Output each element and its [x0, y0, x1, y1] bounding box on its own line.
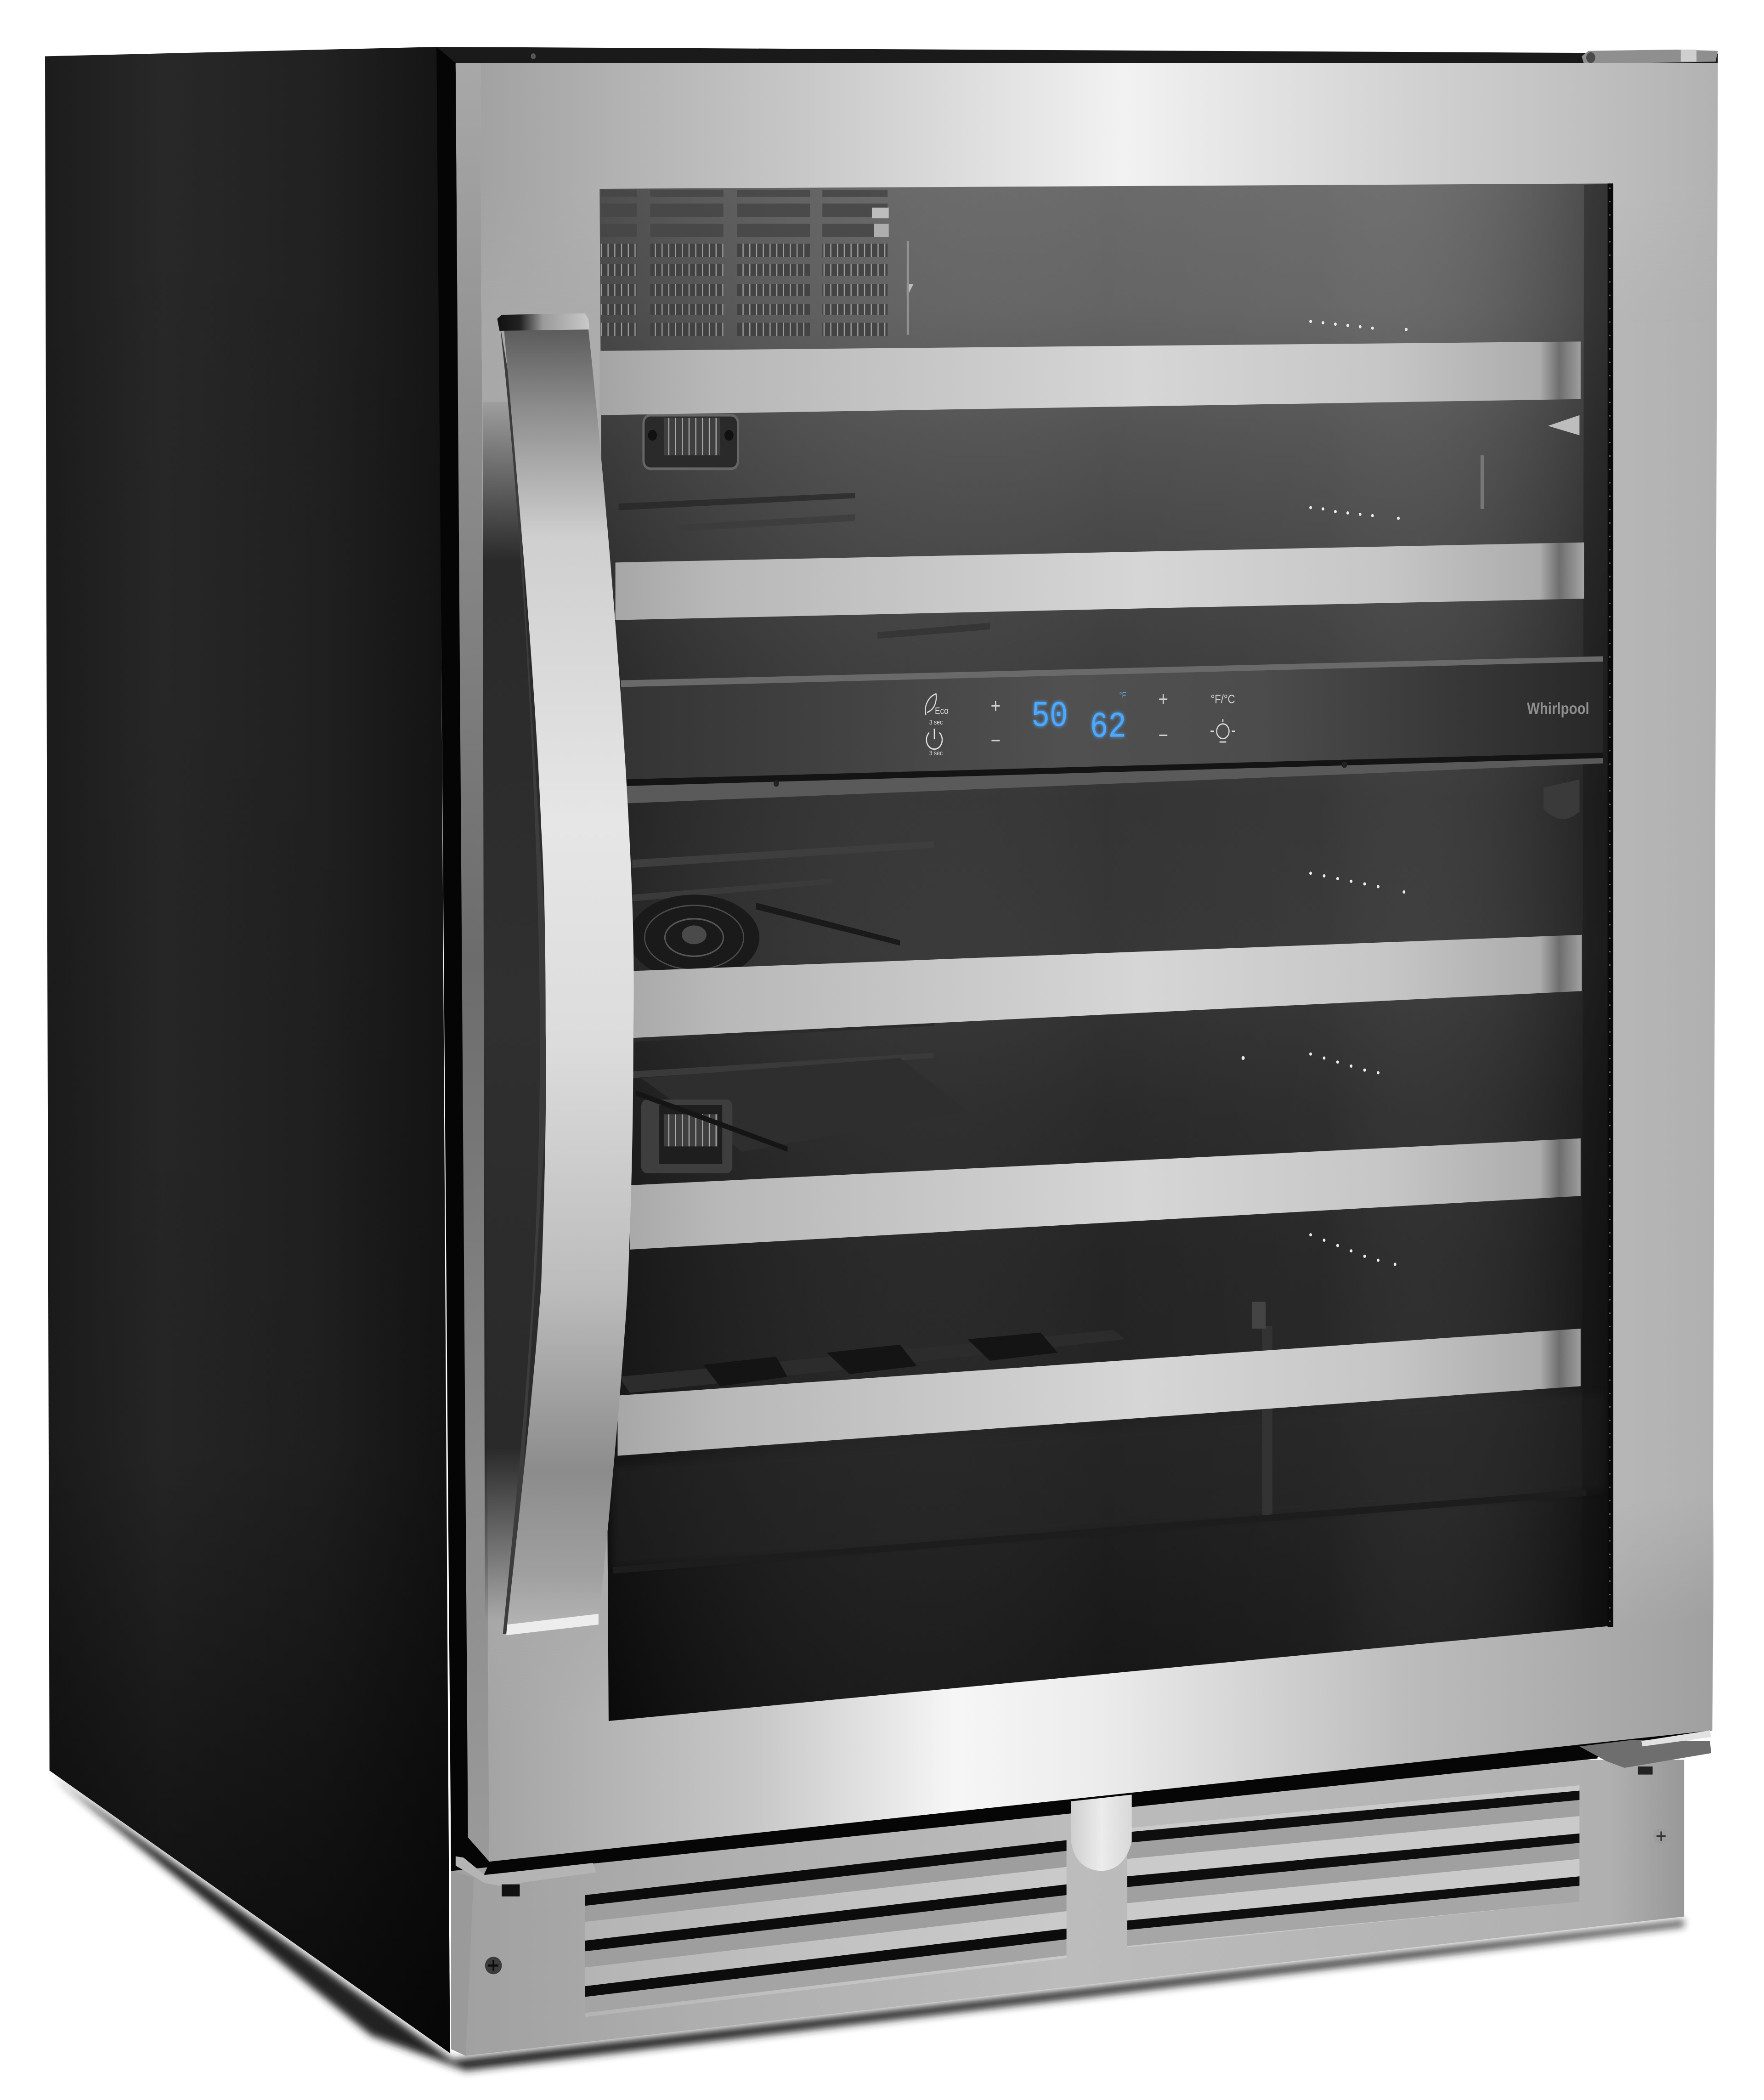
cabinet side panel: [45, 47, 450, 2053]
handle dark edge: [499, 322, 551, 1634]
right screw: [1653, 1828, 1669, 1844]
rear evaporator grille: [601, 190, 914, 336]
glass window: [599, 183, 1613, 1721]
right zone plus and minus: [1159, 687, 1168, 747]
upper rack rails: [619, 493, 990, 639]
right side clips: [1481, 415, 1579, 509]
upper compressor coil: [644, 415, 738, 469]
icon: eco leaf: [925, 694, 949, 726]
wine shelf 2: [616, 543, 1584, 620]
door frame bottom rail: [486, 1473, 1714, 1862]
handle bottom cap: [506, 1614, 599, 1635]
lower interior reflection: [613, 1393, 1603, 1567]
wine shelf 5: [617, 1329, 1581, 1456]
center latch tab: [1071, 1794, 1132, 1871]
control panel: [621, 656, 1603, 804]
icon: power button: 3 sec: [929, 749, 943, 757]
icon: eco leaf: 3 sec: [929, 719, 943, 726]
wine shelf 4: [630, 1138, 1581, 1250]
wine shelf 3: [632, 935, 1582, 1038]
icon: eco leaf: Eco: [935, 705, 949, 716]
door frame stiles: [481, 63, 1718, 1862]
door latch bracket: [1544, 780, 1579, 819]
icon: power button: [927, 729, 943, 757]
left zone plus and minus: −: [991, 729, 1001, 752]
handle top cap: [497, 313, 589, 331]
brand logo: Whirlpool: [1527, 699, 1589, 717]
top hinge: [1582, 50, 1718, 64]
ventilation plinth: [451, 1748, 1684, 2056]
door frame bevel: [456, 63, 489, 1862]
icon: temperature unit: °F/°C: [1210, 693, 1235, 706]
degree indicator: °F: [1119, 691, 1126, 700]
plinth shadow gap: [468, 1730, 1712, 1880]
icon: light bulb: [1210, 719, 1235, 742]
left zone plus and minus: [991, 694, 1001, 752]
handle recess shadow: [483, 402, 551, 1620]
door handle: [497, 313, 634, 1635]
bottom rack and support pole: [613, 1302, 1586, 1574]
right zone plus and minus: −: [1159, 724, 1168, 747]
rear fan: [629, 841, 934, 980]
door frame top rail: [481, 63, 1718, 257]
plinth plate: [451, 1760, 1684, 2056]
left zone plus and minus: +: [991, 694, 1001, 717]
lower right hinge: [1579, 1730, 1711, 1775]
cabinet top rim and gasket: [436, 47, 1718, 1875]
shelf indicator lights: [1242, 320, 1408, 1266]
left zone temperature 50: 50: [1031, 696, 1068, 737]
lower rack and compressor coil: [632, 1018, 967, 1173]
lower left hinge: [456, 1856, 596, 1896]
handle body: [504, 329, 634, 1634]
plinth top gap shading: [484, 1748, 1598, 1875]
wine shelf 1: [599, 341, 1581, 415]
right zone temperature 62: 62: [1090, 706, 1126, 747]
left louver group: [585, 1840, 1067, 2017]
floor shadow: [52, 1776, 1684, 2071]
right zone plus and minus: +: [1159, 687, 1168, 710]
left screw: [485, 1957, 502, 1974]
glass right edge seal: [1582, 183, 1613, 1629]
door frame: [456, 63, 1718, 1862]
right louver group: [1127, 1785, 1579, 1947]
plinth left return: [451, 1871, 474, 2056]
